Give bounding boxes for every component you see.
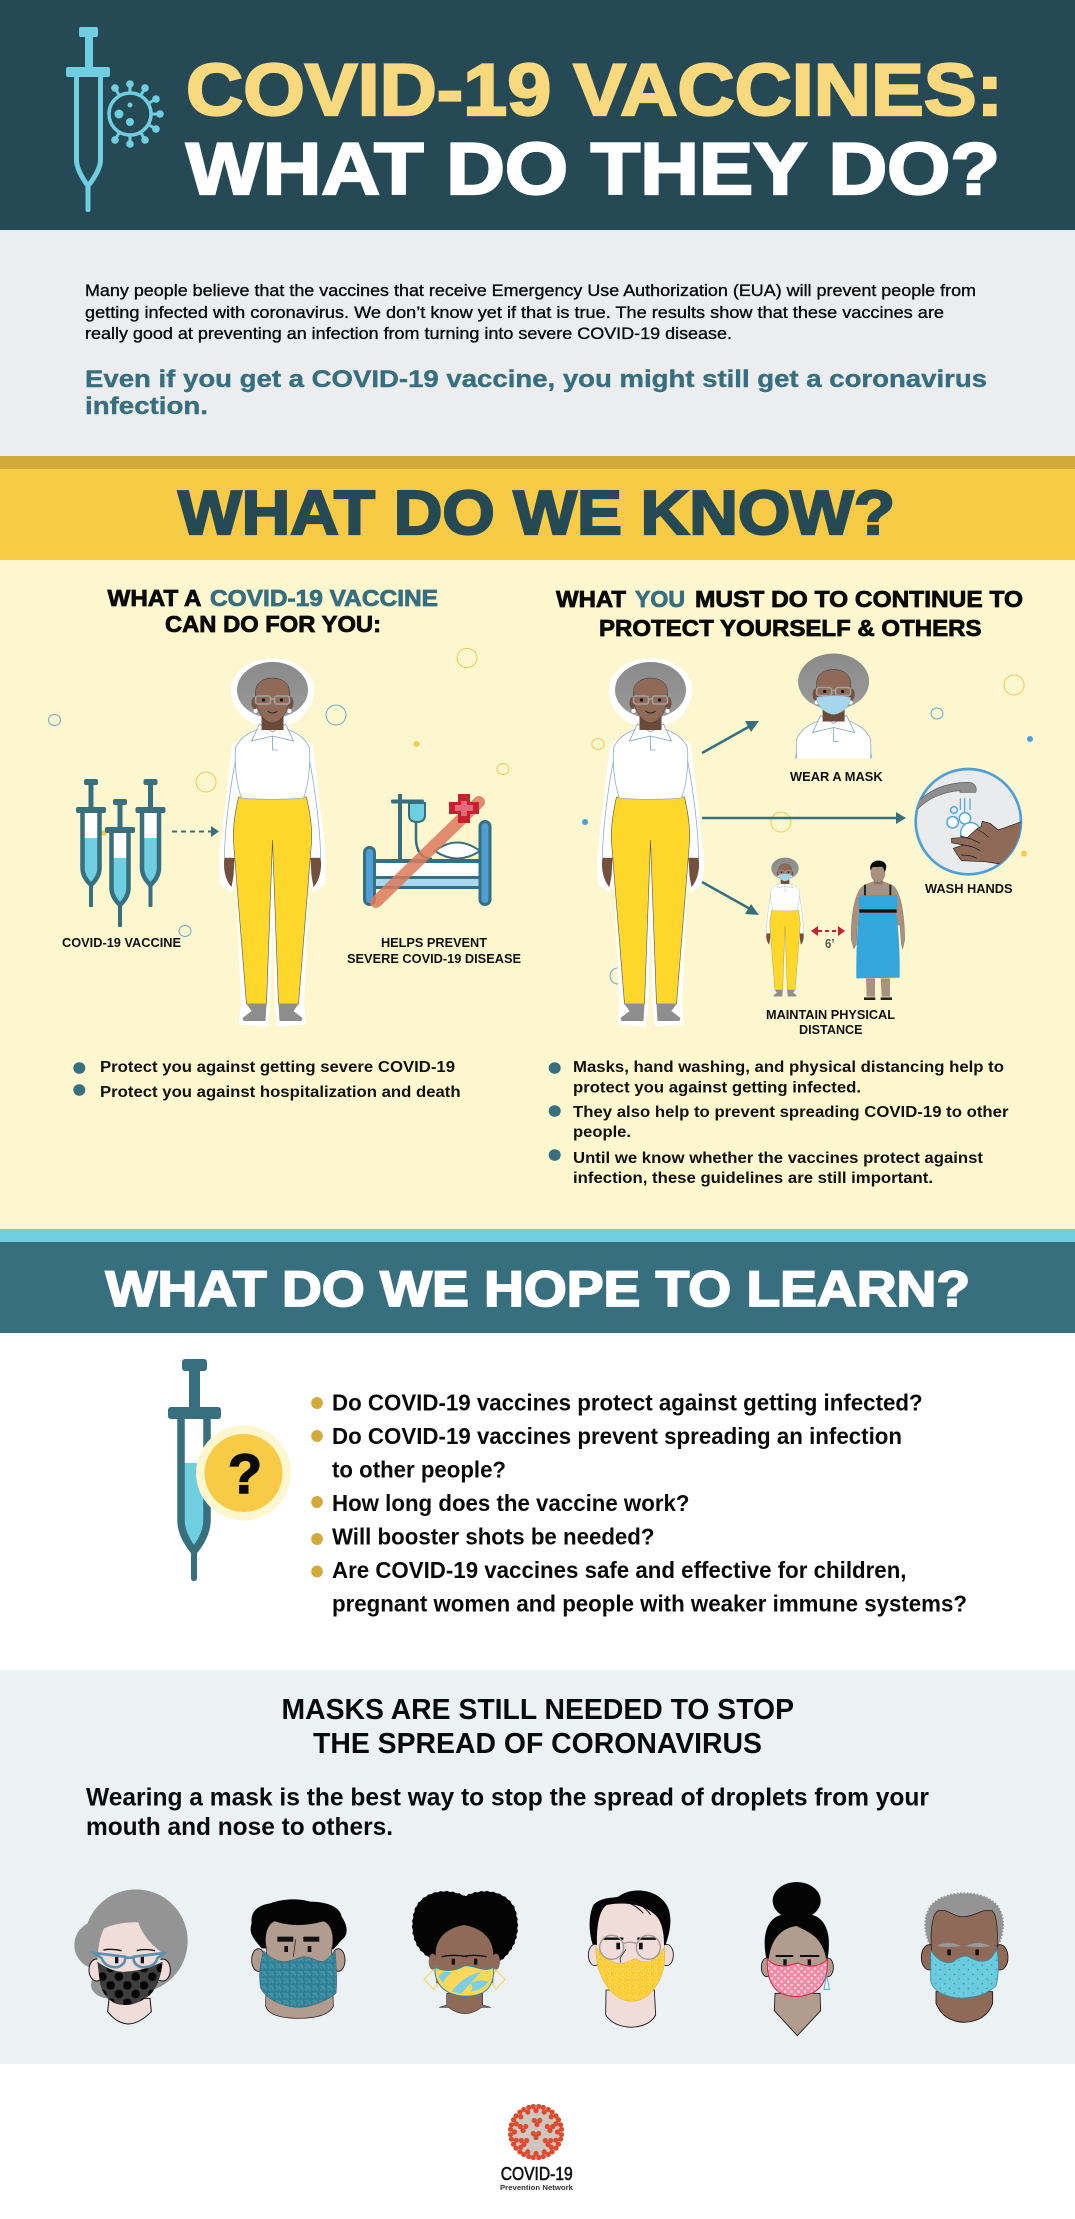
- key message: Even if you get a COVID-19 vaccine, you might still get a coronavirus: [85, 366, 987, 393]
- key message: infection.: [85, 393, 208, 420]
- face: man with teal mask: [251, 1899, 347, 2018]
- left column heading: COVID-19 VACCINE: [210, 585, 438, 611]
- bullets: right column: [549, 1059, 1008, 1187]
- bullets: right column: Masks, hand washing, and physical distancing help to: [573, 1059, 1004, 1076]
- intro paragraph: Many people believe that the vaccines that receive Emergency Use Authorization (EUA) will prevent people from: [85, 281, 976, 300]
- panel: what do we know heading band: [0, 456, 1075, 560]
- bullets: left column: Protect you against getting severe COVID-19: [100, 1059, 455, 1076]
- intro paragraph: [85, 281, 976, 343]
- panel: what do we hope to learn content: [0, 1333, 1075, 1670]
- question list: Are COVID-19 vaccines safe and effective for children,: [332, 1557, 906, 1583]
- key message: [85, 366, 987, 420]
- question list: Do COVID-19 vaccines protect against getting infected?: [332, 1390, 923, 1416]
- arrow: six feet distance: [811, 926, 845, 936]
- face: man with glasses and yellow mask: [588, 1890, 673, 2027]
- label: helps prevent severe disease: HELPS PREVENT: [381, 935, 487, 950]
- logo: covid-19 prevention network: COVID-19: [501, 2164, 573, 2184]
- figure: woman, right column: [598, 659, 704, 1026]
- panel: introduction: [0, 230, 1075, 456]
- icon: hospital bed with strike: [364, 794, 490, 904]
- panel: footer: [0, 2064, 1075, 2219]
- icon: syringe with question mark: [168, 1359, 291, 1581]
- label: maintain physical distance: [766, 1007, 895, 1037]
- bullets: left column: [73, 1059, 461, 1101]
- label: wear a mask: WEAR A MASK: [790, 769, 883, 784]
- arrow: to physical distance: [702, 882, 759, 915]
- panel: masks are still needed: [0, 1670, 1075, 2064]
- heading: MASKS ARE STILL NEEDED TO STOP: [282, 1694, 794, 1726]
- label: maintain physical distance: MAINTAIN PHYSICAL: [766, 1007, 895, 1022]
- decorative bubbles: [48, 648, 1033, 984]
- right column heading: [556, 586, 1023, 641]
- panel: header banner: [0, 0, 1075, 230]
- face: older man with blue mask: [921, 1893, 1008, 2022]
- text block: Wearing a mask is the best way to stop the spread of droplets from your: [86, 1784, 929, 1812]
- question list: [311, 1390, 967, 1616]
- left column heading: WHAT A: [108, 585, 202, 611]
- right column heading: WHAT: [556, 586, 626, 612]
- left column heading: [108, 585, 438, 637]
- question list: Do COVID-19 vaccines prevent spreading an infection: [332, 1423, 902, 1449]
- left column heading: CAN DO FOR YOU:: [165, 611, 381, 637]
- question list: to other people?: [332, 1456, 506, 1482]
- label: wash hands: WASH HANDS: [925, 881, 1013, 896]
- label: six feet: 6’: [825, 936, 834, 951]
- heading: [282, 1694, 794, 1760]
- title: WHAT DO THEY DO?: [186, 129, 1000, 210]
- icon: syringe with question mark: ?: [228, 1442, 262, 1505]
- title: [186, 50, 1003, 210]
- text block: mouth and nose to others.: [86, 1813, 393, 1841]
- label: helps prevent severe disease: SEVERE COVID-19 DISEASE: [347, 951, 521, 966]
- question list: How long does the vaccine work?: [332, 1490, 690, 1516]
- figure: small masked woman: [766, 858, 804, 997]
- label: covid-19 vaccine: COVID-19 VACCINE: [62, 935, 181, 950]
- heading: THE SPREAD OF CORONAVIRUS: [313, 1728, 762, 1760]
- bullets: right column: protect you against getting infected.: [573, 1080, 861, 1096]
- arrow: to wash hands: [702, 812, 906, 824]
- panel: what do we know content: [0, 560, 1075, 1229]
- figure: woman in blue dress: [851, 861, 905, 1000]
- figure: woman, left column: [220, 659, 326, 1026]
- panel: what do we hope to learn heading band: [0, 1229, 1075, 1333]
- right column heading: PROTECT YOURSELF & OTHERS: [599, 615, 982, 641]
- bullets: right column: Until we know whether the vaccines protect against: [573, 1150, 984, 1167]
- face: woman with bun and pink mask: [761, 1882, 833, 2036]
- logo: covid-19 prevention network: [500, 2104, 574, 2192]
- arrow: vaccine to person: [172, 826, 219, 837]
- text block: [86, 1784, 929, 1841]
- title: COVID-19 VACCINES:: [186, 50, 1003, 131]
- bullets: right column: They also help to prevent spreading COVID-19 to other: [573, 1104, 1008, 1121]
- icon: three vaccine syringes: [76, 779, 166, 927]
- heading: WHAT DO WE KNOW?: [178, 479, 895, 548]
- heading: WHAT DO WE HOPE TO LEARN?: [106, 1261, 970, 1317]
- bullets: left column: Protect you against hospitalization and death: [100, 1084, 461, 1101]
- label: maintain physical distance: DISTANCE: [799, 1022, 863, 1037]
- right column heading: YOU: [635, 586, 685, 612]
- label: helps prevent severe disease: [347, 935, 521, 966]
- right column heading: MUST DO TO CONTINUE TO: [695, 586, 1023, 612]
- face: older woman with black dotted mask: [74, 1889, 188, 2024]
- question list: Will booster shots be needed?: [332, 1524, 654, 1550]
- question list: pregnant women and people with weaker immune systems?: [332, 1590, 967, 1616]
- face: woman with afro and yellow mask: [414, 1893, 516, 2014]
- figure: woman wearing a mask: [794, 654, 872, 758]
- bullets: right column: people.: [573, 1124, 631, 1141]
- icon: syringe with virus: [66, 27, 164, 212]
- icon: washing hands: [912, 769, 1022, 874]
- bullets: right column: infection, these guidelines are still important.: [573, 1170, 933, 1187]
- arrow: to wear a mask: [702, 721, 759, 753]
- logo: covid-19 prevention network: Prevention Network: [500, 2183, 574, 2192]
- intro paragraph: getting infected with coronavirus. We don’t know yet if that is true. The results show that these vaccines are: [85, 303, 944, 322]
- intro paragraph: really good at preventing an infection from turning into severe COVID-19 disease.: [85, 324, 732, 343]
